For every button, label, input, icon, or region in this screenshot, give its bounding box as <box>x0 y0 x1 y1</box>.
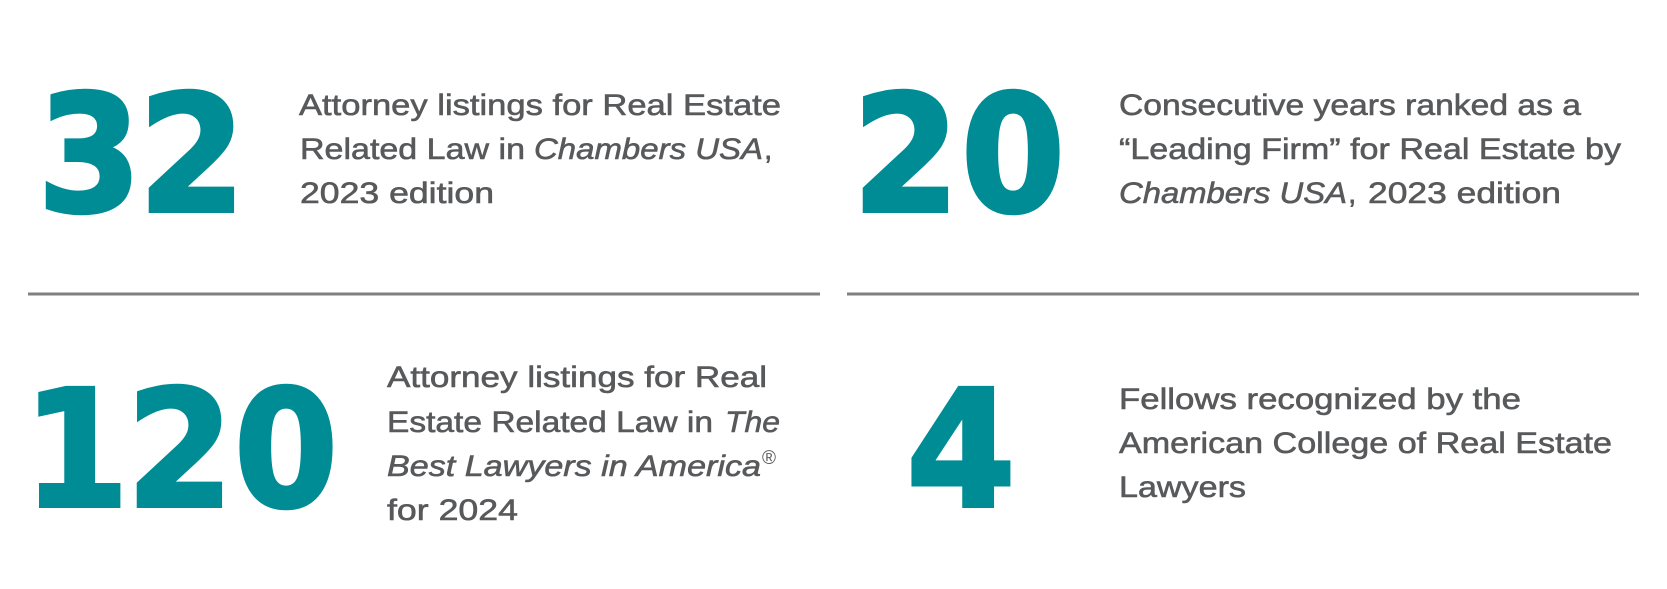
description: Best Lawyers attorney listings: ® <box>762 448 776 469</box>
description: consecutive years as Leading Firm: , <box>1348 177 1356 210</box>
description: Chambers USA attorney listings <box>299 89 781 210</box>
description: Best Lawyers attorney listings: for 2024 <box>387 494 518 527</box>
description: Best Lawyers attorney listings <box>387 361 780 527</box>
divider: left <box>28 292 820 296</box>
description: American College fellows: Lawyers <box>1119 471 1246 504</box>
big number: 20: 2 <box>852 61 960 250</box>
big number: 4: 4 <box>906 356 1016 545</box>
stat panel: 32 attorney listings <box>38 61 781 250</box>
big number: 32 <box>38 61 246 250</box>
description: Chambers USA attorney listings: 2023 edition <box>300 177 494 210</box>
description: American College fellows: American College of Real Estate <box>1119 427 1612 460</box>
big number: 120: 2 <box>126 356 234 545</box>
description: consecutive years as Leading Firm <box>1119 89 1621 210</box>
description: Chambers USA attorney listings: Attorney listings for Real Estate <box>299 89 781 122</box>
description: Chambers USA attorney listings: , <box>764 133 772 166</box>
description: Chambers USA attorney listings: Chambers USA <box>534 133 763 166</box>
description: consecutive years as Leading Firm: “Leading Firm” for Real Estate by <box>1119 133 1621 166</box>
description: Best Lawyers attorney listings: Attorney listings for Real <box>387 361 767 394</box>
description: Best Lawyers attorney listings: The <box>725 406 780 439</box>
big number: 32: 3 <box>38 61 141 250</box>
big number: 20: 0 <box>961 61 1065 250</box>
big number: 20 <box>852 61 1065 250</box>
big number: 120 <box>23 356 338 545</box>
description: consecutive years as Leading Firm: Chambers USA <box>1119 177 1347 210</box>
description: Chambers USA attorney listings: Related Law in <box>300 133 525 166</box>
description: Best Lawyers attorney listings: Estate Related Law in <box>387 406 713 439</box>
divider: right <box>847 292 1639 296</box>
description: consecutive years as Leading Firm: 2023 edition <box>1368 177 1561 210</box>
description: consecutive years as Leading Firm: Consecutive years ranked as a <box>1119 89 1581 122</box>
big number: 120: 1 <box>23 357 129 545</box>
stat panel: 20 consecutive years <box>852 61 1621 250</box>
description: American College fellows <box>1119 383 1612 504</box>
big number: 32: 2 <box>138 61 246 250</box>
stat panel: 4 fellows <box>906 356 1612 545</box>
big number: 120: 0 <box>234 356 338 545</box>
description: American College fellows: Fellows recognized by the <box>1119 383 1521 416</box>
stat panel: 120 attorney listings <box>23 356 780 545</box>
description: Best Lawyers attorney listings: Best Lawyers in America <box>387 450 761 483</box>
